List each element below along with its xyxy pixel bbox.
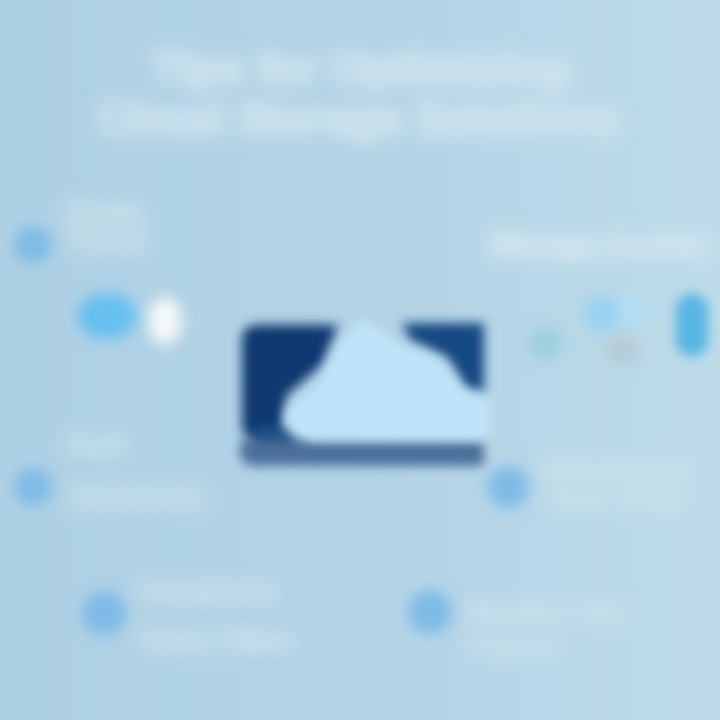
text block: Compress [138, 575, 278, 606]
text block: Encrypt [545, 453, 690, 484]
text block: Monitor Use [468, 596, 624, 629]
icon: white toggle [148, 297, 182, 345]
point 6: bottom right [408, 590, 624, 656]
icon: bullet circle [82, 591, 126, 635]
icon: blue bar [676, 294, 708, 356]
icon: green dot [529, 327, 563, 359]
point 5: bottom left [82, 575, 294, 656]
icon: light blue blob [583, 296, 653, 332]
point 4: middle right [487, 453, 690, 514]
icon: bullet circle [487, 466, 529, 508]
point 3: middle left [14, 429, 204, 516]
text block: Back [68, 429, 128, 460]
title: Cloud Storage Solutions [98, 92, 618, 144]
icon: bullet circle [14, 468, 52, 506]
icon: grey blob [605, 336, 639, 364]
icon frame: dark storage box [240, 323, 484, 466]
text block: Your Files [138, 625, 294, 656]
text block [138, 575, 294, 656]
icon: bullet circle [408, 590, 452, 634]
text block [468, 596, 624, 656]
icon: light cloud [284, 318, 490, 440]
title [98, 42, 618, 144]
text block [68, 429, 204, 516]
heading text: Tiers [68, 225, 148, 256]
title: Tips for Optimizing [150, 42, 570, 94]
icon: bullet circle [14, 226, 52, 264]
central cloud icon [240, 318, 490, 466]
text block: Schedule [70, 478, 204, 516]
text block [545, 453, 690, 514]
text block: Regularly [468, 636, 558, 656]
icon: blue toggle [77, 293, 137, 339]
point 2: top right [490, 226, 708, 364]
text block: Your Data [545, 483, 685, 514]
heading text [68, 197, 148, 256]
point 1: top left [14, 197, 182, 345]
heading text: Data [68, 197, 145, 228]
